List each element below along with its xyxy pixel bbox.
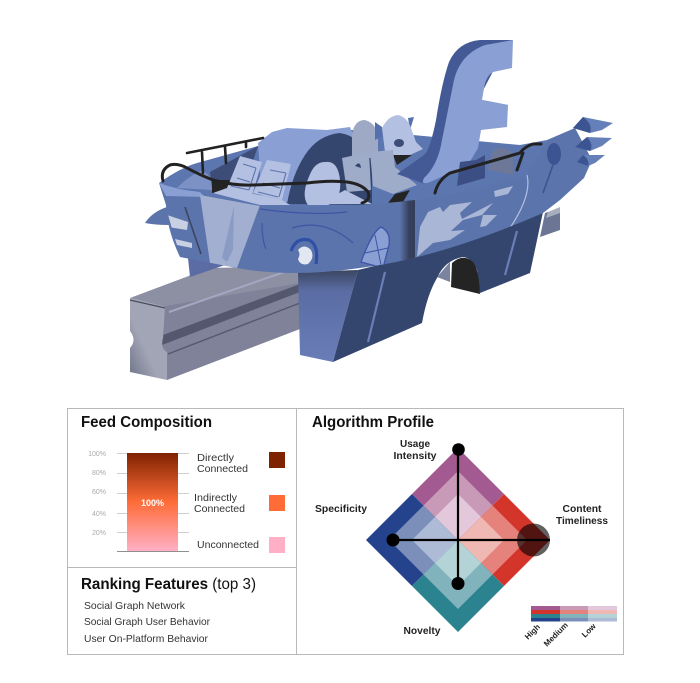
legend: connection type: Indirectly [194, 492, 238, 504]
legend: connection type [194, 452, 285, 553]
panel frame [68, 408, 624, 654]
left rear leg [188, 258, 225, 277]
axis labels: Timeliness [556, 516, 608, 527]
black arch [451, 258, 480, 294]
right seats [457, 148, 513, 186]
legend: connection type: Connected [197, 463, 248, 475]
back seats [305, 115, 423, 205]
hull [159, 128, 592, 273]
flames [417, 186, 513, 257]
hull markings [167, 143, 561, 268]
axis labels [315, 439, 608, 637]
diamond chart [366, 443, 550, 632]
eye [291, 239, 317, 264]
axis labels: Content [562, 504, 602, 515]
tail claws [573, 117, 613, 166]
colour legend: High [523, 622, 542, 641]
ranking list [84, 600, 210, 645]
black railings [162, 138, 541, 203]
stacked bar chart [88, 451, 189, 552]
F logo [397, 40, 513, 184]
legend: connection type: Unconnected [197, 539, 259, 551]
ranking list: Social Graph Network [84, 600, 186, 612]
stacked bar chart: 80% [92, 470, 106, 477]
stacked bar chart: 100% [141, 498, 164, 508]
colour legend [523, 606, 617, 648]
back wall [159, 130, 547, 208]
stacked bar chart: 100% [88, 451, 106, 458]
axis labels: Usage [400, 439, 430, 450]
legend: connection type: Directly [197, 452, 235, 464]
colour legend: Medium [542, 621, 570, 648]
stacked bar chart: 60% [92, 489, 106, 496]
heading: ranking features: Ranking Features (top 3) [81, 576, 256, 593]
interior left [177, 146, 258, 193]
stacked bar chart: 40% [92, 511, 106, 518]
ranking list: User On-Platform Behavior [84, 633, 208, 645]
panel: feed composition [81, 414, 285, 553]
stacked bar chart: 20% [92, 530, 106, 537]
underside highlights [368, 231, 517, 342]
ranking list: Social Graph User Behavior [84, 616, 210, 628]
hull rim [159, 183, 205, 197]
cabin [258, 127, 372, 205]
colour legend: Low [580, 621, 598, 639]
axis labels: Intensity [394, 451, 437, 462]
panel: algorithm profile [312, 414, 617, 648]
left front leg [298, 270, 358, 362]
axis labels: Novelty [404, 626, 441, 637]
left fin [145, 207, 169, 225]
illustration: boat on rail [130, 40, 613, 380]
legend: connection type: Connected [194, 503, 245, 515]
axis labels: Specificity [315, 504, 367, 515]
dark hull underside [333, 212, 543, 362]
heading: feed composition: Feed Composition [81, 414, 212, 431]
heading: algorithm profile: Algorithm Profile [312, 414, 434, 431]
open book [213, 156, 291, 205]
panel: ranking features [81, 576, 256, 645]
rail [130, 207, 560, 380]
